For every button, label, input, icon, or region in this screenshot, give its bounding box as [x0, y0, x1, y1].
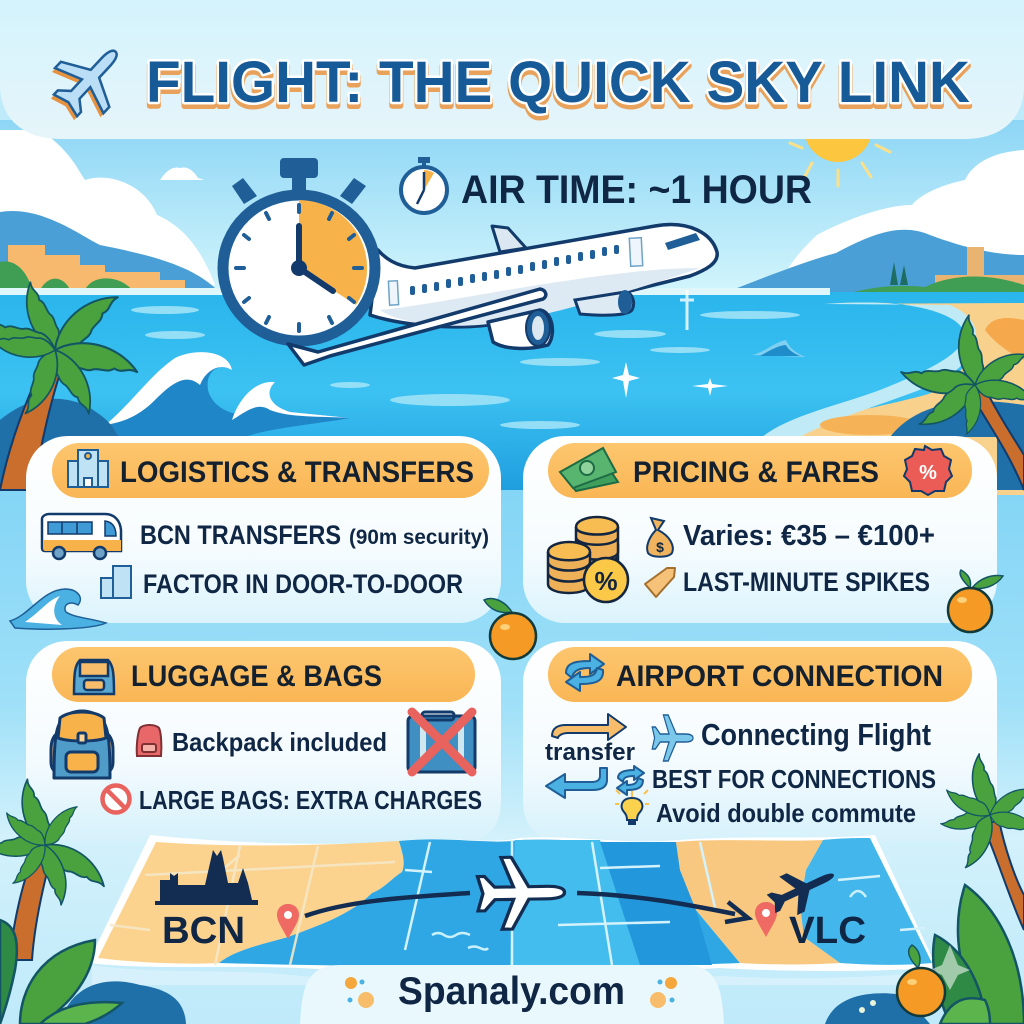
- icon: light bulb: [615, 790, 649, 825]
- icon: swap arrows: [566, 654, 604, 691]
- icon: office building: [68, 450, 108, 487]
- icon: transfer arrow left: [546, 768, 607, 798]
- icon: footer ornament left: [345, 977, 374, 1008]
- mountains and towns: [0, 211, 1024, 315]
- watch face: [223, 195, 375, 341]
- bushes and foreground leaves left: [0, 920, 186, 1024]
- icon: bus: [42, 514, 121, 559]
- icon: prohibition sign: [102, 786, 130, 812]
- icon: banknotes: [560, 448, 618, 491]
- sea: [0, 288, 1024, 495]
- text: avoid double commute: Avoid double commute: [656, 798, 916, 828]
- icon: money bag: [647, 518, 673, 557]
- heading: logistics: [52, 443, 489, 498]
- icon: BCN pin: [277, 904, 299, 939]
- icon: VLC pin: [755, 902, 777, 937]
- footer: website: Spanaly.com: [398, 970, 625, 1013]
- title text: FLIGHT: THE QUICK SKY LINK: [146, 50, 970, 115]
- text: bcn transfers: (90m security): [349, 526, 489, 549]
- icon: small wave: [10, 589, 106, 629]
- icon: orange centre: [484, 598, 536, 659]
- plane body behind watch: [370, 225, 717, 327]
- icon: dark plane silhouette: [762, 855, 843, 923]
- icon: discount badge: [904, 446, 952, 495]
- icon: money bag: $: [656, 539, 664, 555]
- heading: luggage: [52, 647, 475, 702]
- icon: small plane: [652, 715, 693, 761]
- heading: logistics: LOGISTICS & TRANSFERS: [120, 456, 474, 489]
- icon: orange bottom: [897, 945, 945, 1016]
- icon: map airplane: [477, 856, 565, 930]
- text: bcn transfers: [140, 520, 489, 550]
- panel: pricing and fares: [523, 436, 997, 623]
- icon: small building: [101, 566, 131, 598]
- icon: gold coins: %: [594, 566, 618, 596]
- bushes and foreground leaves right: [825, 885, 1024, 1024]
- text: large bags: LARGE BAGS: EXTRA CHARGES: [139, 785, 482, 815]
- palm tree: upper right: [890, 314, 1024, 490]
- panel: airport connection: [523, 641, 997, 842]
- icon: sun: [790, 94, 890, 186]
- text: door to door: FACTOR IN DOOR-TO-DOOR: [143, 569, 463, 599]
- air time callout: [401, 157, 812, 213]
- heading: luggage: LUGGAGE & BAGS: [131, 660, 382, 693]
- icon: price tag: [645, 568, 675, 597]
- icon: footer ornament right: [650, 977, 677, 1008]
- text: backpack included: Backpack included: [172, 727, 387, 757]
- text: last minute: LAST-MINUTE SPIKES: [683, 567, 930, 597]
- icon: gold coins: [548, 517, 628, 602]
- title text: FLIGHT: THE QUICK SKY LINK: [146, 54, 970, 119]
- title panel: [0, 0, 1024, 139]
- icon: crossed out suitcase: [408, 712, 475, 772]
- rear engine: [575, 290, 634, 315]
- heading: pricing: PRICING & FARES: [633, 456, 879, 489]
- route line left: [305, 893, 470, 916]
- label: BCN: BCN: [162, 910, 245, 952]
- heading: airport: AIRPORT CONNECTION: [616, 660, 943, 693]
- text: bcn transfers: BCN TRANSFERS: [140, 520, 341, 550]
- icon: small swap arrows: [617, 766, 644, 795]
- icon: orange right: [948, 570, 1003, 632]
- icon: Barcelona skyline: [155, 850, 258, 905]
- palm tree: lower right: [940, 752, 1024, 930]
- icon: backpack: [51, 711, 113, 778]
- lower background: [0, 490, 1024, 1024]
- clock hero: stopwatch: [223, 158, 717, 341]
- text: best for connections: BEST FOR CONNECTIONS: [652, 764, 936, 794]
- water highlights: [131, 306, 800, 429]
- icon: small stopwatch: [401, 157, 447, 213]
- label: VLC: VLC: [789, 910, 866, 952]
- icon: transfer arrow right: [552, 714, 626, 740]
- panel: luggage and bags: [26, 641, 501, 842]
- ocean waves: [105, 352, 350, 437]
- icon: small red backpack: [137, 725, 161, 756]
- heading: airport: [548, 647, 972, 702]
- air time callout: AIR TIME: ~1 HOUR: [461, 168, 812, 212]
- icon: small backpack: [74, 660, 114, 694]
- text: connecting flight: Connecting Flight: [701, 717, 931, 752]
- palm tree: lower left: [0, 777, 112, 960]
- icon: discount badge: %: [919, 462, 937, 484]
- route arrow right: [577, 893, 748, 922]
- icon: title airplane: [38, 29, 140, 132]
- background sky: [0, 120, 1024, 300]
- text: fare range: Varies: €35 – €100+: [683, 520, 935, 552]
- beach: [770, 303, 1024, 495]
- map: BCN to VLC: [88, 835, 937, 985]
- text: transfer: transfer: [545, 739, 635, 766]
- wave marks on map: [432, 891, 866, 950]
- heading: pricing: [548, 443, 972, 498]
- clouds: [0, 130, 1024, 290]
- palm tree: upper left: [0, 279, 141, 490]
- panel: logistics and transfers: [26, 436, 501, 623]
- airplane wing and engine: [288, 289, 552, 365]
- footer: website: [300, 965, 724, 1024]
